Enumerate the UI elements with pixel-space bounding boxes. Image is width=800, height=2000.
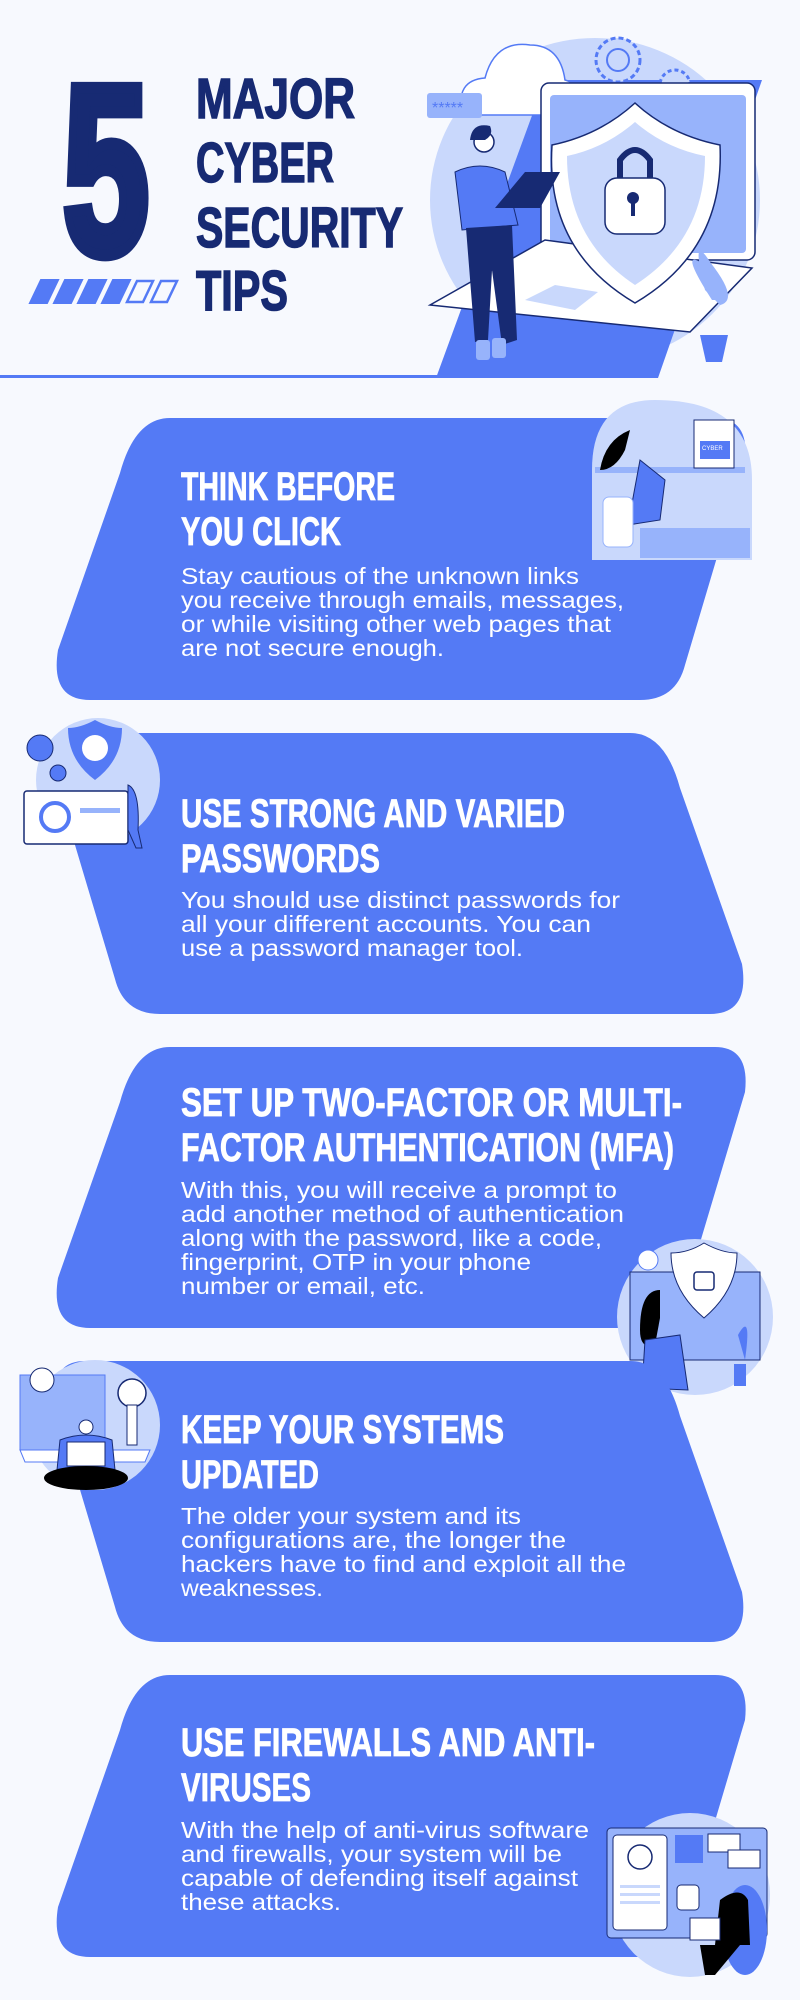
card 4 title: UPDATED xyxy=(181,1453,319,1497)
header title: TIPS xyxy=(196,259,288,323)
card 3 body: along with the password, like a code, xyxy=(181,1225,602,1251)
shield xyxy=(551,103,720,303)
lock xyxy=(620,150,650,180)
card 4 body: hackers have to find and exploit all the xyxy=(181,1551,626,1577)
header: big number 5: 5 xyxy=(63,36,149,304)
header illustration: security laptop xyxy=(427,38,762,378)
card 1 body: or while visiting other web pages that xyxy=(181,611,612,637)
person xyxy=(474,132,494,152)
card 1 title: THINK BEFORE xyxy=(181,465,395,509)
card 5 body: capable of defending itself against xyxy=(181,1865,579,1891)
header title: SECURITY xyxy=(196,196,403,260)
card 4: keep systems updated xyxy=(20,1360,743,1642)
card 1 body: Stay cautious of the unknown links xyxy=(181,563,579,589)
card 5 body xyxy=(181,1817,589,1915)
card 1 body: are not secure enough. xyxy=(181,635,444,661)
card 2 title: USE STRONG AND VARIED xyxy=(181,792,565,836)
card 4 title xyxy=(181,1408,504,1497)
card 2 body: use a password manager tool. xyxy=(181,935,523,961)
card 4 illustration: hacker with key xyxy=(20,1360,160,1490)
card 2 title xyxy=(181,792,565,881)
card 5 body: With the help of anti-virus software xyxy=(181,1817,589,1843)
card 1 illustration: woman shopping online: CYBER xyxy=(702,446,723,452)
card 3 body: fingerprint, OTP in your phone xyxy=(181,1249,531,1275)
card 4 body: weaknesses. xyxy=(180,1575,323,1601)
plant xyxy=(692,260,722,300)
card 2: strong passwords xyxy=(24,718,743,1014)
laptop base xyxy=(430,240,752,332)
cloud xyxy=(461,44,579,115)
header illustration: security laptop: ***** xyxy=(432,100,463,117)
password bubble xyxy=(427,93,482,118)
card 3 body: add another method of authentication xyxy=(181,1201,624,1227)
card 5: firewalls and anti-viruses xyxy=(57,1675,746,1957)
header title: MAJOR xyxy=(196,67,355,131)
card 5 title xyxy=(181,1721,595,1810)
card 5 title: VIRUSES xyxy=(181,1766,311,1810)
card 2 illustration: shield check and laptop xyxy=(24,718,160,848)
card 2 body: You should use distinct passwords for xyxy=(181,887,620,913)
card 3 illustration: woman unlocking shield xyxy=(617,1239,773,1395)
card 1 title: YOU CLICK xyxy=(181,510,341,554)
card 1 illustration: woman shopping online xyxy=(592,400,752,560)
card 4 title: KEEP YOUR SYSTEMS xyxy=(181,1408,504,1452)
card 1 body: you receive through emails, messages, xyxy=(181,587,624,613)
gears xyxy=(596,38,640,82)
card 1 body xyxy=(181,563,624,661)
card 4 body: The older your system and its xyxy=(181,1503,521,1529)
card 2 title: PASSWORDS xyxy=(181,837,380,881)
progress stripes xyxy=(30,280,177,303)
card 5 body: and firewalls, your system will be xyxy=(181,1841,562,1867)
card 5 body: these attacks. xyxy=(181,1889,341,1915)
card 3 body: number or email, etc. xyxy=(181,1273,425,1299)
card 3 body xyxy=(181,1177,624,1299)
card 1: think before you click xyxy=(57,400,752,700)
card 2 body: all your different accounts. You can xyxy=(181,911,591,937)
header title: CYBER xyxy=(196,131,334,195)
card 5 illustration: firewall dashboard and hacker xyxy=(607,1813,770,1977)
card 3 body: With this, you will receive a prompt to xyxy=(181,1177,617,1203)
laptop screen xyxy=(541,83,755,260)
card 2 body xyxy=(181,887,620,961)
card 4 body xyxy=(180,1503,626,1601)
header title xyxy=(196,67,403,323)
card 3: two-factor authentication xyxy=(57,1047,746,1328)
card 5 title: USE FIREWALLS AND ANTI- xyxy=(181,1721,595,1765)
header divider line xyxy=(0,375,440,378)
card 3 title xyxy=(181,1081,682,1170)
card 4 body: configurations are, the longer the xyxy=(181,1527,566,1553)
card 1 title xyxy=(181,465,395,554)
